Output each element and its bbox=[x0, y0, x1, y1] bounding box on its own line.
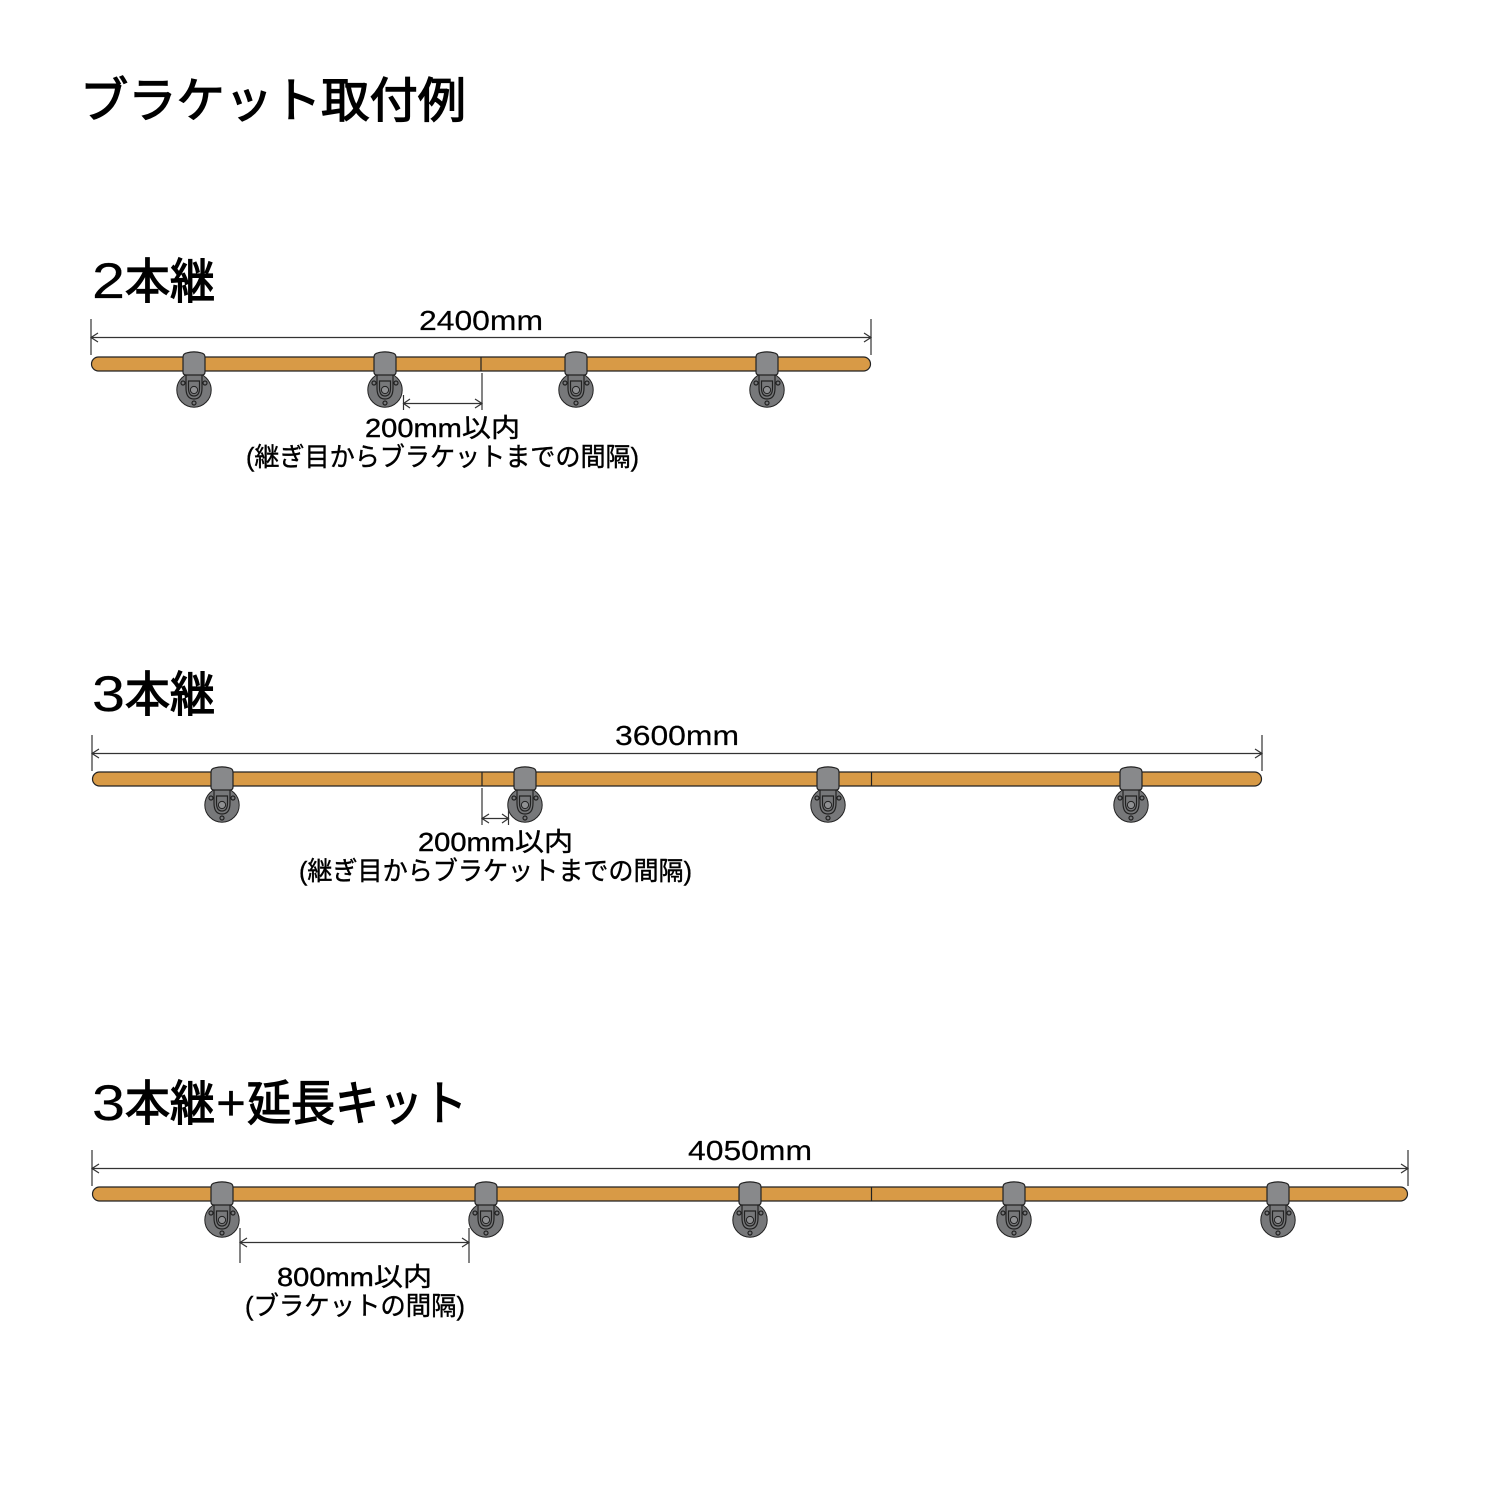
bracket 1 bbox=[177, 352, 211, 407]
heading: 3本継: 3 bbox=[92, 666, 125, 722]
dimension: 4050mm overall bbox=[92, 1150, 1408, 1186]
bracket 1 bbox=[205, 767, 239, 822]
heading: 3本継 bbox=[92, 666, 215, 722]
bracket 1 bbox=[205, 1182, 239, 1237]
panel: 3本継+延長キット bbox=[92, 1075, 1408, 1321]
label: 2400mm: 2400mm bbox=[419, 305, 543, 336]
heading: 3本継+延長キット bbox=[92, 1075, 467, 1131]
label: 200mm以内: 200mm以内 bbox=[418, 827, 573, 857]
note: bracket spacing: (ブラケットの間隔) bbox=[245, 1291, 465, 1321]
note: seam to bracket spacing: (継ぎ目からブラケットまでの間隔) bbox=[246, 442, 639, 472]
handrail bbox=[92, 772, 1262, 786]
bracket 2 bbox=[469, 1182, 503, 1237]
dimension: 2400mm overall bbox=[91, 319, 871, 355]
label: 3600mm: 3600mm bbox=[615, 720, 739, 751]
panel: 3本継 bbox=[92, 666, 1262, 886]
bracket 4 bbox=[750, 352, 784, 407]
dimension: 800mm gap bbox=[240, 1228, 469, 1263]
bracket 4 bbox=[997, 1182, 1031, 1237]
dimension: 200mm gap bbox=[404, 373, 482, 410]
bracket 2 bbox=[508, 767, 542, 822]
title: ブラケット取付例 bbox=[80, 75, 466, 128]
label: 200mm以内: 200mm以内 bbox=[365, 413, 520, 443]
bracket 3 bbox=[811, 767, 845, 822]
heading: 2本継: 2 bbox=[92, 253, 125, 309]
panel: 2本継 bbox=[91, 253, 871, 472]
handrail bbox=[92, 1187, 1408, 1201]
bracket 2 bbox=[368, 352, 402, 407]
dimension: 200mm gap bbox=[482, 788, 508, 825]
heading: 3本継+延長キット: 本継 bbox=[125, 1078, 215, 1131]
handrail bbox=[92, 357, 870, 371]
bracket 4 bbox=[1114, 767, 1148, 822]
heading: 3本継+延長キット: + bbox=[216, 1075, 246, 1131]
bracket 5 bbox=[1261, 1182, 1295, 1237]
bracket 3 bbox=[559, 352, 593, 407]
heading: 3本継+延長キット: 3 bbox=[92, 1075, 125, 1131]
heading: 3本継+延長キット: 延長キット bbox=[247, 1078, 467, 1131]
label: 4050mm: 4050mm bbox=[688, 1135, 812, 1166]
heading: 2本継 bbox=[92, 253, 215, 309]
dimension: 3600mm overall bbox=[92, 735, 1262, 771]
label: 800mm以内: 800mm以内 bbox=[277, 1262, 432, 1292]
heading: 3本継: 本継 bbox=[125, 669, 215, 722]
bracket 3 bbox=[733, 1182, 767, 1237]
heading: 2本継: 本継 bbox=[125, 256, 215, 309]
note: seam to bracket spacing: (継ぎ目からブラケットまでの間隔) bbox=[299, 856, 692, 886]
